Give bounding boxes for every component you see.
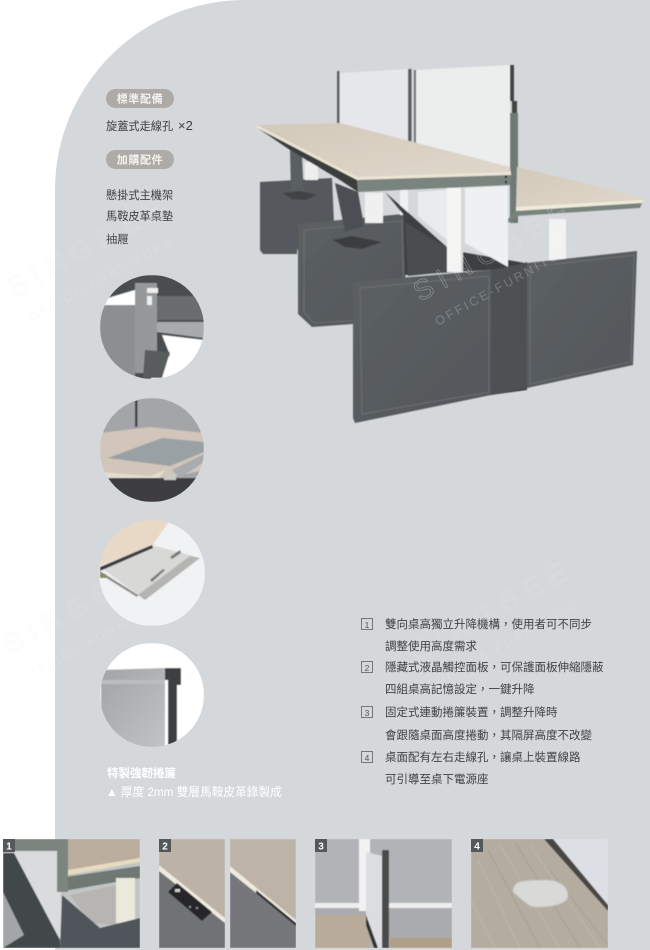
rear screen right — [414, 65, 518, 223]
feature 4 — [362, 750, 581, 786]
photo 2b: retracted panel — [230, 839, 296, 948]
badge 3: 3 — [318, 842, 324, 852]
rear dark upright — [290, 150, 304, 196]
rear screen left — [337, 69, 412, 144]
feature 3 — [362, 705, 592, 742]
detail circle: mainframe hanger — [100, 275, 204, 380]
tabletop A edge — [357, 175, 511, 192]
pill: standard: 標準配備 — [117, 92, 163, 106]
roller blind caption: ▲ 厚度 2mm 雙層馬鞍皮革錄製成 — [106, 785, 282, 799]
detail circle: roller blind — [100, 643, 204, 748]
panel: standard and optional accessories — [106, 89, 193, 246]
feature 4: 4 — [365, 753, 370, 763]
watermarks: OFFICE-FURNITURE — [27, 233, 177, 325]
badge 1 — [3, 839, 15, 852]
badge 4 — [471, 839, 483, 852]
optional items: 抽屜 — [106, 232, 128, 246]
feature 3: 會跟隨桌面高度捲動，其隔屏高度不改變 — [385, 728, 592, 742]
watermarks: SINGBEE — [408, 193, 581, 307]
photo 1: frame detail — [3, 839, 140, 948]
tabletop B edge — [508, 203, 642, 223]
feature 1 — [362, 617, 592, 653]
optional items: 懸掛式主機架 — [106, 188, 173, 202]
numbered feature list — [362, 617, 604, 786]
main white leg — [447, 188, 463, 272]
central beam — [385, 192, 527, 395]
feature 1: 雙向桌高獨立升降機構，使用者可不同步 — [385, 617, 592, 631]
detail circle: leather desk pad — [100, 398, 204, 502]
feature 3: 固定式連動捲簾裝置，調整升降時 — [385, 705, 558, 719]
rear modesty panel — [260, 178, 334, 254]
feature 4: 可引導至桌下電源座 — [385, 772, 488, 786]
standard item: 旋蓋式走線孔 — [106, 121, 173, 133]
optional items — [106, 188, 173, 246]
main desk illustration — [257, 65, 643, 423]
middle tray — [333, 236, 382, 249]
pill: optional — [106, 150, 174, 169]
rear white leg — [305, 162, 318, 180]
watermarks: OFFICE-FURNITURE — [433, 237, 583, 329]
watermarks: OFFICE-FURNITURE — [433, 597, 583, 689]
standard item: ×2 — [178, 118, 193, 133]
centre modesty panel — [491, 263, 527, 395]
badge 2: 2 — [162, 842, 168, 852]
middle white legs — [365, 190, 408, 223]
badge 1: 1 — [6, 842, 12, 852]
feature 4: 桌面配有左右走線孔，讓桌上裝置線路 — [385, 750, 581, 764]
photo 2a: control panel — [159, 839, 225, 948]
middle modesty panel — [298, 214, 407, 327]
watermarks: SINGBEE — [2, 189, 175, 303]
feature 2 — [362, 660, 604, 696]
tabletop B — [516, 167, 643, 210]
feature 2: 2 — [365, 663, 370, 673]
pill: optional: 加購配件 — [117, 152, 163, 166]
right modesty panel — [527, 251, 637, 388]
tabletop A — [257, 123, 511, 180]
photo 4: cable grommet — [471, 839, 608, 948]
right white leg — [549, 219, 566, 262]
roller blind caption: 特製強韌捲簾 — [107, 766, 176, 780]
badge 4: 4 — [474, 842, 480, 852]
badge 3 — [315, 839, 327, 852]
photo 3: roller blind — [315, 839, 452, 948]
watermarks: SINGBEE — [0, 546, 171, 660]
watermarks: SINGBEE — [406, 553, 579, 667]
feature 3: 3 — [365, 708, 370, 718]
white curtain under desk — [418, 190, 447, 240]
feature 2: 四組桌高記憶設定，一鍵升降 — [385, 682, 535, 696]
pill: standard — [106, 89, 174, 108]
optional items: 馬鞍皮革桌墊 — [106, 209, 173, 223]
watermarks — [0, 189, 583, 689]
detail circle: drawer — [99, 520, 205, 626]
middle dark upright — [335, 183, 364, 232]
watermarks: OFFICE-FURNITURE — [25, 591, 175, 683]
feature 2: 隱藏式液晶觸控面板，可保護面板伸縮隱蔽 — [385, 660, 604, 674]
rear tray — [283, 191, 317, 200]
front modesty panel — [353, 270, 491, 423]
roller blind caption — [106, 766, 282, 799]
feature 1: 1 — [365, 620, 370, 630]
feature 1: 調整使用高度需求 — [385, 639, 477, 653]
badge 2 — [159, 839, 171, 852]
